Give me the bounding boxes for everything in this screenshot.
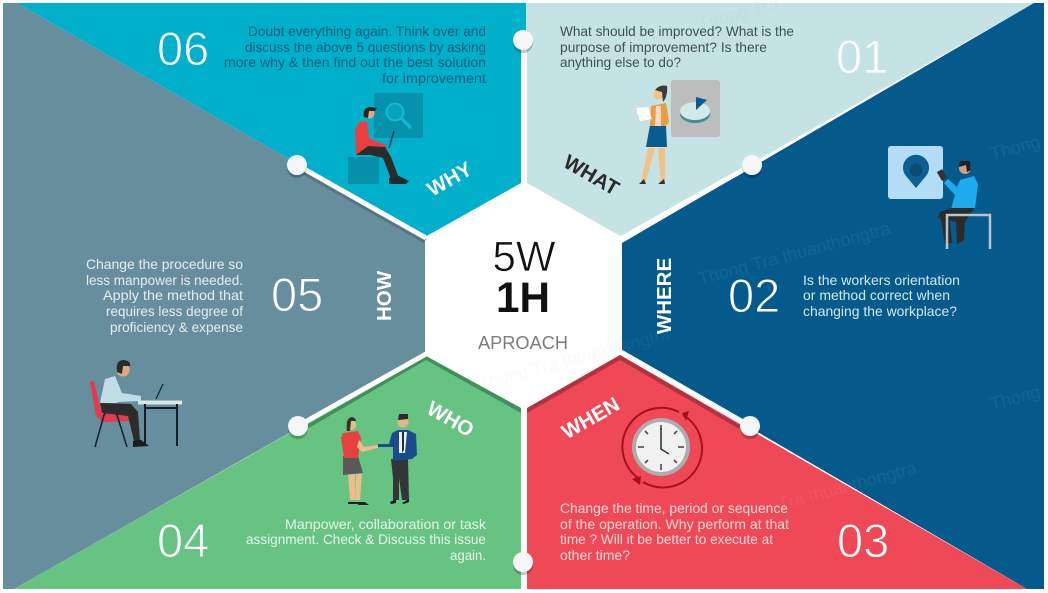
text: why description: for improvement <box>382 70 486 86</box>
number 06: 06 <box>157 22 209 75</box>
number 04: 04 <box>157 514 209 567</box>
panel: what <box>526 3 1034 237</box>
text: who description <box>246 516 487 563</box>
text: how description: less manpower is needed. <box>86 272 243 288</box>
connector lines and knobs <box>287 30 762 575</box>
panel: when <box>527 355 1027 589</box>
text: when description: other time? <box>560 547 630 563</box>
icon: man with location pin <box>888 146 990 249</box>
text: how description <box>86 256 243 335</box>
text: where description: changing the workplace? <box>803 303 957 319</box>
text: how description: Change the procedure so <box>86 256 243 272</box>
panel: why <box>17 3 526 237</box>
watermarks <box>476 0 1042 514</box>
text: how description: Apply the method that <box>103 287 243 303</box>
icon: person at desk <box>90 360 182 447</box>
panel: where <box>622 3 1044 589</box>
text: who description: again. <box>450 547 486 563</box>
number 02: 02 <box>728 269 780 322</box>
number 05: 05 <box>271 268 323 321</box>
icon: clock <box>622 408 702 488</box>
text: who description: assignment. Check & Discuss this issue <box>246 531 486 547</box>
icon: person with magnifier <box>348 93 423 184</box>
watermarks: Thong Tra thuanthongtra <box>696 218 893 289</box>
label: where: WHERE <box>653 258 676 334</box>
label: when: WHEN <box>558 393 624 444</box>
text: what description: purpose of improvement? Is there <box>560 39 767 55</box>
icon: handshake people <box>341 414 417 505</box>
number 01: 01 <box>836 30 888 83</box>
center hexagon <box>425 183 622 408</box>
text: when description: of the operation. Why perform at that <box>560 516 789 532</box>
center title: 5W: 5W <box>492 233 556 281</box>
label: what: WHAT <box>560 150 623 201</box>
panel: who <box>14 356 521 589</box>
label: why: WHY <box>423 157 476 201</box>
text: where description: Is the workers orientation <box>803 272 960 288</box>
text: what description: What should be improved? What is the <box>560 23 794 39</box>
watermarks: Tra thuanthongtra <box>776 457 920 514</box>
label: how: HOW <box>373 270 396 321</box>
watermarks: Thong <box>988 131 1042 164</box>
text: why description: Doubt everything again. Think over and <box>248 23 486 39</box>
text: how description: proficiency & expense <box>110 319 243 335</box>
label: who: WHO <box>423 397 478 442</box>
text: why description: more why & then find out the best solution <box>224 54 486 70</box>
text: what description: anything else to do? <box>560 54 681 70</box>
center subtitle: APROACH <box>478 332 568 353</box>
text: where description <box>803 272 960 319</box>
watermarks: Thong Tra thuanthongtra <box>476 323 673 394</box>
text: why description <box>224 23 486 86</box>
text: who description: Manpower, collaboration or task <box>285 516 487 532</box>
text: where description: or method correct when <box>803 287 950 303</box>
text: why description: discuss the above 5 questions by asking <box>245 39 486 55</box>
icon: woman with pie chart <box>636 80 720 184</box>
number 03: 03 <box>837 514 889 567</box>
panel: how <box>3 3 425 589</box>
text: what description <box>560 23 794 70</box>
text: when description <box>560 500 789 563</box>
text: how description: requires less degree of <box>106 303 243 319</box>
center title: 1H: 1H <box>496 274 550 322</box>
watermarks: Thong <box>988 381 1042 414</box>
text: when description: Change the time, period or sequence <box>560 500 788 516</box>
text: when description: time ? Will it be better to execute at <box>560 531 773 547</box>
